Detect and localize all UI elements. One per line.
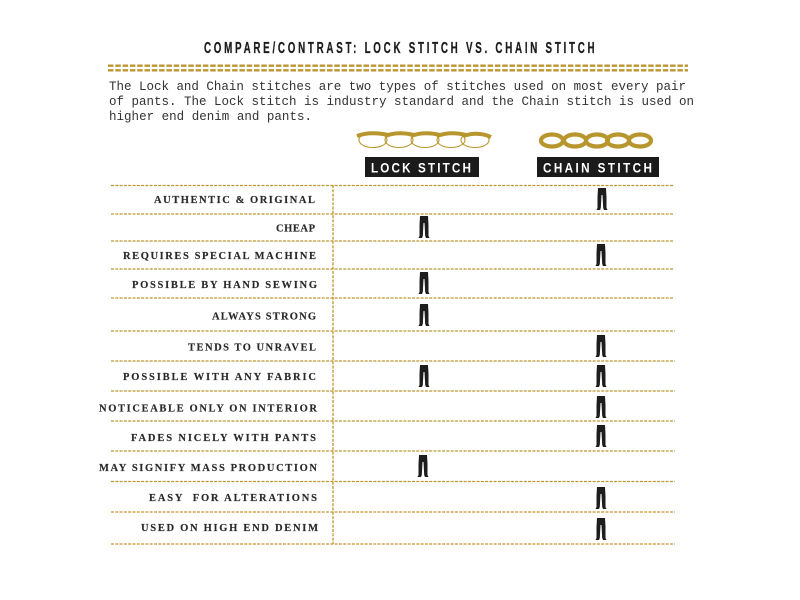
row labels: NOTICEABLE ONLY ON INTERIOR	[99, 404, 317, 414]
icons: lock stitch pants marks	[418, 216, 430, 477]
row labels: USED ON HIGH END DENIM	[141, 523, 318, 534]
row labels: MAY SIGNIFY MASS PRODUCTION	[99, 463, 317, 474]
row labels: EASY FOR ALTERATIONS	[149, 493, 317, 504]
row labels: AUTHENTIC & ORIGINAL	[154, 195, 315, 206]
icon: lock stitch chain	[357, 132, 491, 148]
title: COMPARE/CONTRAST: LOCK STITCH VS. CHAIN STITCH	[204, 39, 595, 57]
intro text: The Lock and Chain stitches are two types of stitches used on most every pair	[109, 80, 686, 94]
heading: lock stitch: LOCK STITCH	[371, 159, 471, 176]
intro text: of pants. The Lock stitch is industry standard and the Chain stitch is used on	[109, 95, 694, 109]
row labels: FADES NICELY WITH PANTS	[131, 433, 316, 444]
row labels: POSSIBLE BY HAND SEWING	[132, 280, 317, 291]
icon: chain stitch chain	[541, 134, 651, 146]
row labels: TENDS TO UNRAVEL	[188, 342, 316, 354]
table grid lines	[111, 185, 675, 544]
row labels: REQUIRES SPECIAL MACHINE	[123, 251, 316, 262]
heading: chain stitch: CHAIN STITCH	[543, 159, 652, 176]
row labels: CHEAP	[276, 224, 316, 234]
icons: chain stitch pants marks	[596, 188, 608, 540]
intro text: higher end denim and pants.	[109, 110, 312, 124]
row labels: ALWAYS STRONG	[212, 312, 316, 322]
double stitched divider	[108, 66, 688, 70]
intro text	[109, 80, 694, 124]
row labels	[99, 195, 318, 534]
row labels: POSSIBLE WITH ANY FABRIC	[123, 372, 316, 383]
